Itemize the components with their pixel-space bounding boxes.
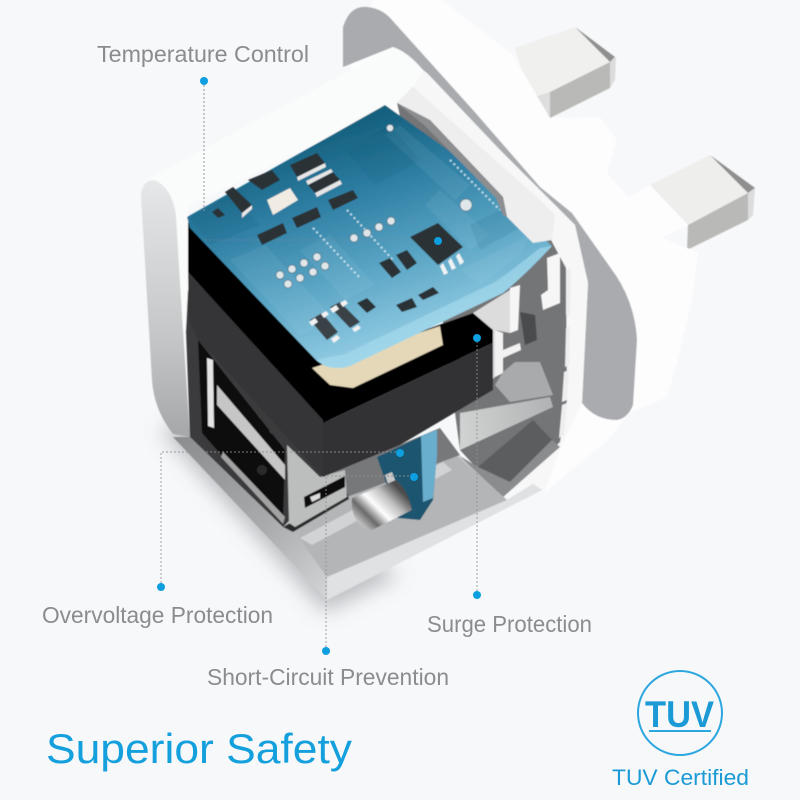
- interior cavity: [397, 87, 567, 497]
- label: short-circuit prevention: Short-Circuit Prevention: [207, 664, 449, 690]
- plug rear body: [350, 0, 698, 492]
- TUV badge: TUV: [645, 694, 714, 735]
- plug pin: lower: [650, 155, 755, 250]
- USB ports: [186, 290, 347, 527]
- heading: Superior Safety: [46, 725, 352, 772]
- leader: short circuit: [326, 476, 414, 651]
- TUV certified caption: TUV Certified: [612, 765, 749, 790]
- label: temperature control: Temperature Control: [97, 41, 309, 67]
- base tray: [173, 428, 542, 600]
- interior parts right: [455, 253, 571, 497]
- label: surge protection: Surge Protection: [427, 611, 592, 637]
- leader: surge: [476, 338, 478, 595]
- board traces: [230, 125, 530, 335]
- plug grey side band: [343, 7, 637, 420]
- circuit board: [187, 105, 552, 368]
- shell top band: [142, 47, 423, 330]
- TUV badge: [638, 671, 722, 755]
- floor shadow: [160, 420, 400, 612]
- plug pin: upper: [515, 27, 616, 118]
- leader: temperature control: [203, 81, 205, 212]
- leader lines: [161, 81, 477, 651]
- shell inner frame: [413, 70, 588, 490]
- leader: overvoltage: [161, 452, 400, 587]
- callout dots: [157, 77, 481, 655]
- label: overvoltage protection: Overvoltage Protection: [42, 602, 273, 628]
- charger illustration: [141, 0, 755, 612]
- board components: [212, 124, 472, 343]
- rail over board right edge: [397, 87, 555, 243]
- capacitor board: [352, 430, 437, 530]
- shell left face: [141, 180, 190, 437]
- transformer block: [188, 222, 493, 477]
